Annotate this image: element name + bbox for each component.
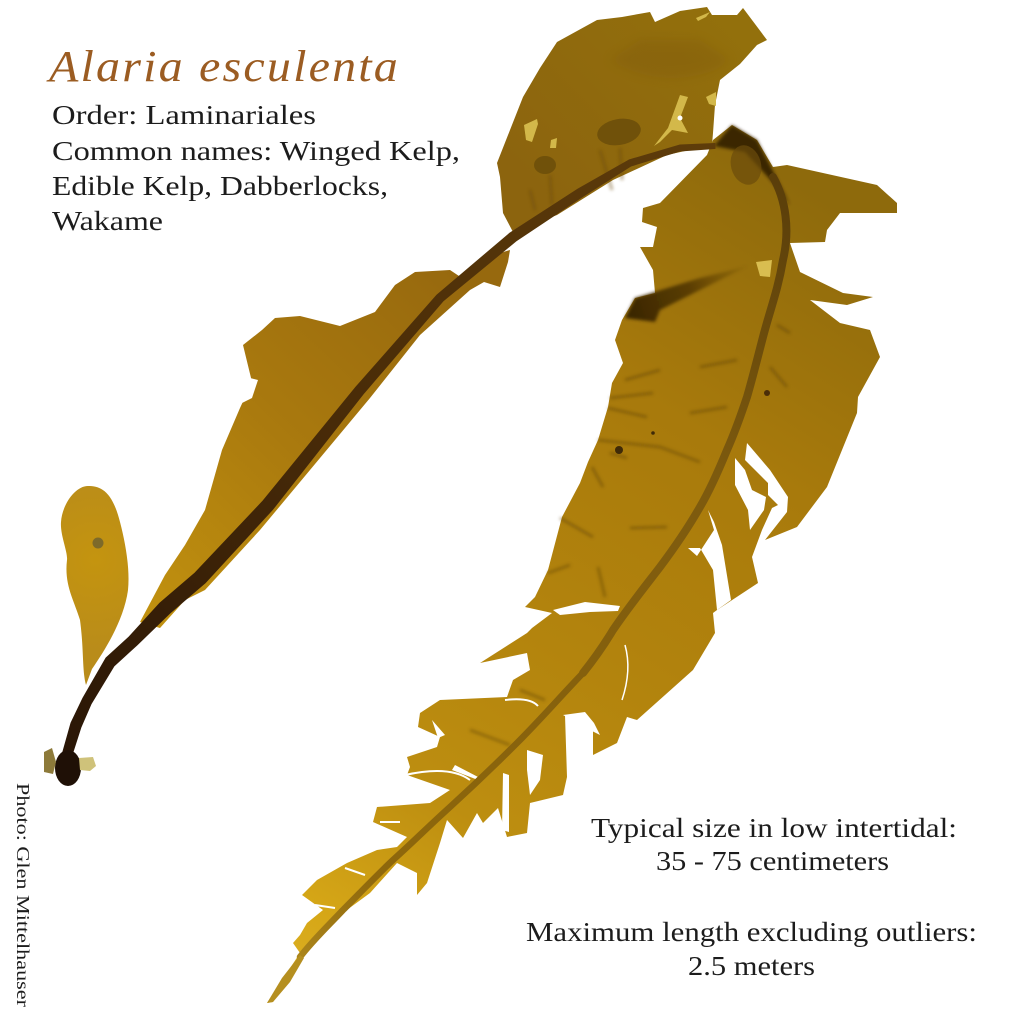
pale torn patches — [524, 12, 716, 148]
taxonomy text block: Common names: Winged Kelp, — [52, 136, 460, 166]
maximum length text: 2.5 meters — [688, 951, 815, 981]
taxonomy text block — [52, 100, 460, 236]
typical size text: 35 - 75 centimeters — [656, 846, 889, 876]
tears in blade — [432, 458, 766, 832]
blade spots — [764, 390, 770, 396]
torn notch in blade — [238, 378, 258, 405]
taxonomy text block: Edible Kelp, Dabberlocks, — [52, 171, 388, 201]
typical size text: Typical size in low intertidal: — [591, 813, 957, 843]
apex shading — [714, 125, 790, 205]
photo: lower blade of first kelp — [140, 250, 510, 628]
blade shading — [610, 40, 730, 78]
photo: holdfast — [44, 748, 96, 786]
title: Alaria esculenta — [46, 42, 400, 91]
photo: first kelp stipe — [62, 144, 715, 755]
frond midrib — [300, 177, 786, 957]
photo: second kelp frond — [267, 125, 897, 1003]
float spots — [530, 115, 643, 210]
frond tip — [267, 955, 304, 1003]
apex oval — [726, 142, 766, 188]
slits in lower fringe — [315, 645, 628, 908]
blade spot — [92, 538, 104, 548]
taxonomy text block: Order: Laminariales — [52, 100, 316, 130]
typical size text — [591, 813, 957, 876]
photo credit: Photo: Glen Mittelhauser — [13, 783, 33, 1007]
photo: upper blade of first kelp — [497, 7, 767, 232]
photo: small juvenile blade — [61, 486, 129, 685]
taxonomy text block: Wakame — [52, 206, 163, 236]
dark fold shadow — [625, 266, 748, 322]
maximum length text — [526, 917, 977, 981]
pale patch — [756, 260, 772, 277]
maximum length text: Maximum length excluding outliers: — [526, 917, 977, 947]
wrinkles — [470, 325, 790, 745]
